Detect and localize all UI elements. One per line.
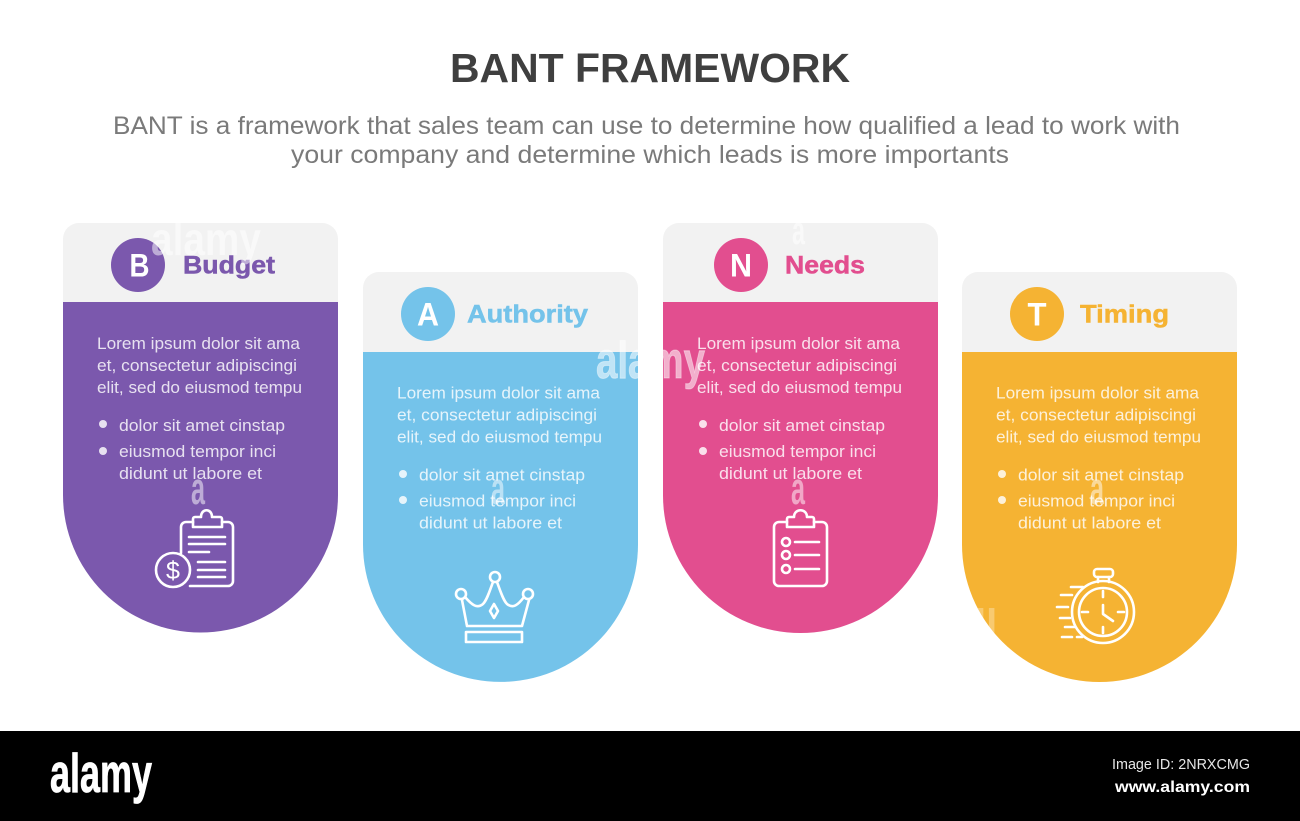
text block: needs description: Lorem ipsum dolor sit ama <box>697 334 901 353</box>
bullet list: budget: eiusmod tempor inci <box>119 442 276 461</box>
bullet list: authority: eiusmod tempor inci <box>419 492 576 510</box>
card header: budget <box>63 223 338 302</box>
bullet list: authority <box>399 466 585 532</box>
text block: needs description: et, consectetur adipiscingi <box>697 356 897 375</box>
icon: clipboard with dollar coin: $ <box>166 557 180 585</box>
letter badge: A <box>401 287 455 341</box>
watermark: a <box>792 209 805 253</box>
watermark: ll <box>975 602 997 646</box>
letter badge: B: B <box>130 248 150 284</box>
icon: checklist clipboard <box>774 510 827 586</box>
heading: Budget: Budget <box>183 252 276 280</box>
text block: authority description: et, consectetur adipiscingi <box>397 406 597 424</box>
text block: budget description: elit, sed do eiusmod tempu <box>97 378 302 397</box>
bullet list: authority: dolor sit amet cinstap <box>419 466 585 484</box>
subtitle <box>113 112 1180 169</box>
watermark <box>151 209 1105 646</box>
heading: Timing: Timing <box>1080 300 1169 328</box>
letter badge: T: T <box>1028 296 1047 332</box>
bullet list: needs: dolor sit amet cinstap <box>719 416 885 435</box>
title: BANT FRAMEWORK <box>450 45 850 91</box>
icon: crown <box>456 572 533 642</box>
watermark: a <box>491 463 506 514</box>
text block: needs description <box>697 334 902 397</box>
letter badge: T <box>1010 287 1064 341</box>
letter badge: N: N <box>730 248 752 284</box>
card header: timing <box>962 272 1237 352</box>
text block: authority description: Lorem ipsum dolor sit ama <box>397 384 601 402</box>
bullet list: budget: dolor sit amet cinstap <box>119 416 285 435</box>
panel: needs <box>663 223 938 633</box>
letter badge: N <box>714 238 768 292</box>
card body: budget <box>63 302 338 633</box>
panel: authority <box>363 272 638 682</box>
letter badge: B <box>111 238 165 292</box>
panel: timing <box>962 272 1237 682</box>
heading: Authority: Authority <box>467 300 588 328</box>
bullet list: timing: dolor sit amet cinstap <box>1018 466 1184 484</box>
watermark: a <box>791 463 806 514</box>
footer logo: alamy <box>50 742 152 804</box>
text block: authority description <box>397 384 602 446</box>
subtitle: your company and determine which leads is more importants <box>291 141 1009 169</box>
watermark: alamy <box>596 332 705 390</box>
bullet list: timing <box>998 466 1184 532</box>
footer bar <box>0 731 1300 821</box>
text block: timing description: et, consectetur adipiscingi <box>996 406 1196 424</box>
bullet list: timing: didunt ut labore et <box>1018 514 1161 532</box>
bullet list: authority: didunt ut labore et <box>419 514 562 532</box>
card body: timing <box>962 352 1237 682</box>
subtitle: BANT is a framework that sales team can use to determine how qualified a lead to work with <box>113 112 1180 140</box>
bullet list: needs: didunt ut labore et <box>719 464 862 483</box>
image id: Image ID: 2NRXCMG <box>1112 756 1250 773</box>
bullet list: needs <box>699 416 885 483</box>
card body: needs <box>663 302 938 633</box>
watermark: a <box>1090 463 1105 514</box>
text block: timing description: elit, sed do eiusmod tempu <box>996 428 1201 446</box>
panel: budget <box>63 223 338 633</box>
text block: needs description: elit, sed do eiusmod tempu <box>697 378 902 397</box>
icon: clipboard with dollar coin <box>156 510 233 587</box>
text block: budget description <box>97 334 302 397</box>
bullet list: budget: didunt ut labore et <box>119 464 262 483</box>
card body: authority <box>363 352 638 682</box>
card header: needs <box>663 223 938 302</box>
watermark: alamy <box>151 213 261 265</box>
bullet list: timing: eiusmod tempor inci <box>1018 492 1175 510</box>
bullet list: budget <box>99 416 285 483</box>
text block: authority description: elit, sed do eiusmod tempu <box>397 428 602 446</box>
card header: authority <box>363 272 638 352</box>
text block: budget description: Lorem ipsum dolor sit ama <box>97 334 301 353</box>
bullet list: needs: eiusmod tempor inci <box>719 442 876 461</box>
text block: timing description: Lorem ipsum dolor sit ama <box>996 384 1200 402</box>
text block: timing description <box>996 384 1201 446</box>
icon: stopwatch <box>1057 569 1134 643</box>
watermark: a <box>191 463 206 514</box>
website: www.alamy.com <box>1114 779 1250 796</box>
letter badge: A: A <box>417 296 439 332</box>
text block: budget description: et, consectetur adipiscingi <box>97 356 297 375</box>
heading: Needs: Needs <box>785 252 865 280</box>
